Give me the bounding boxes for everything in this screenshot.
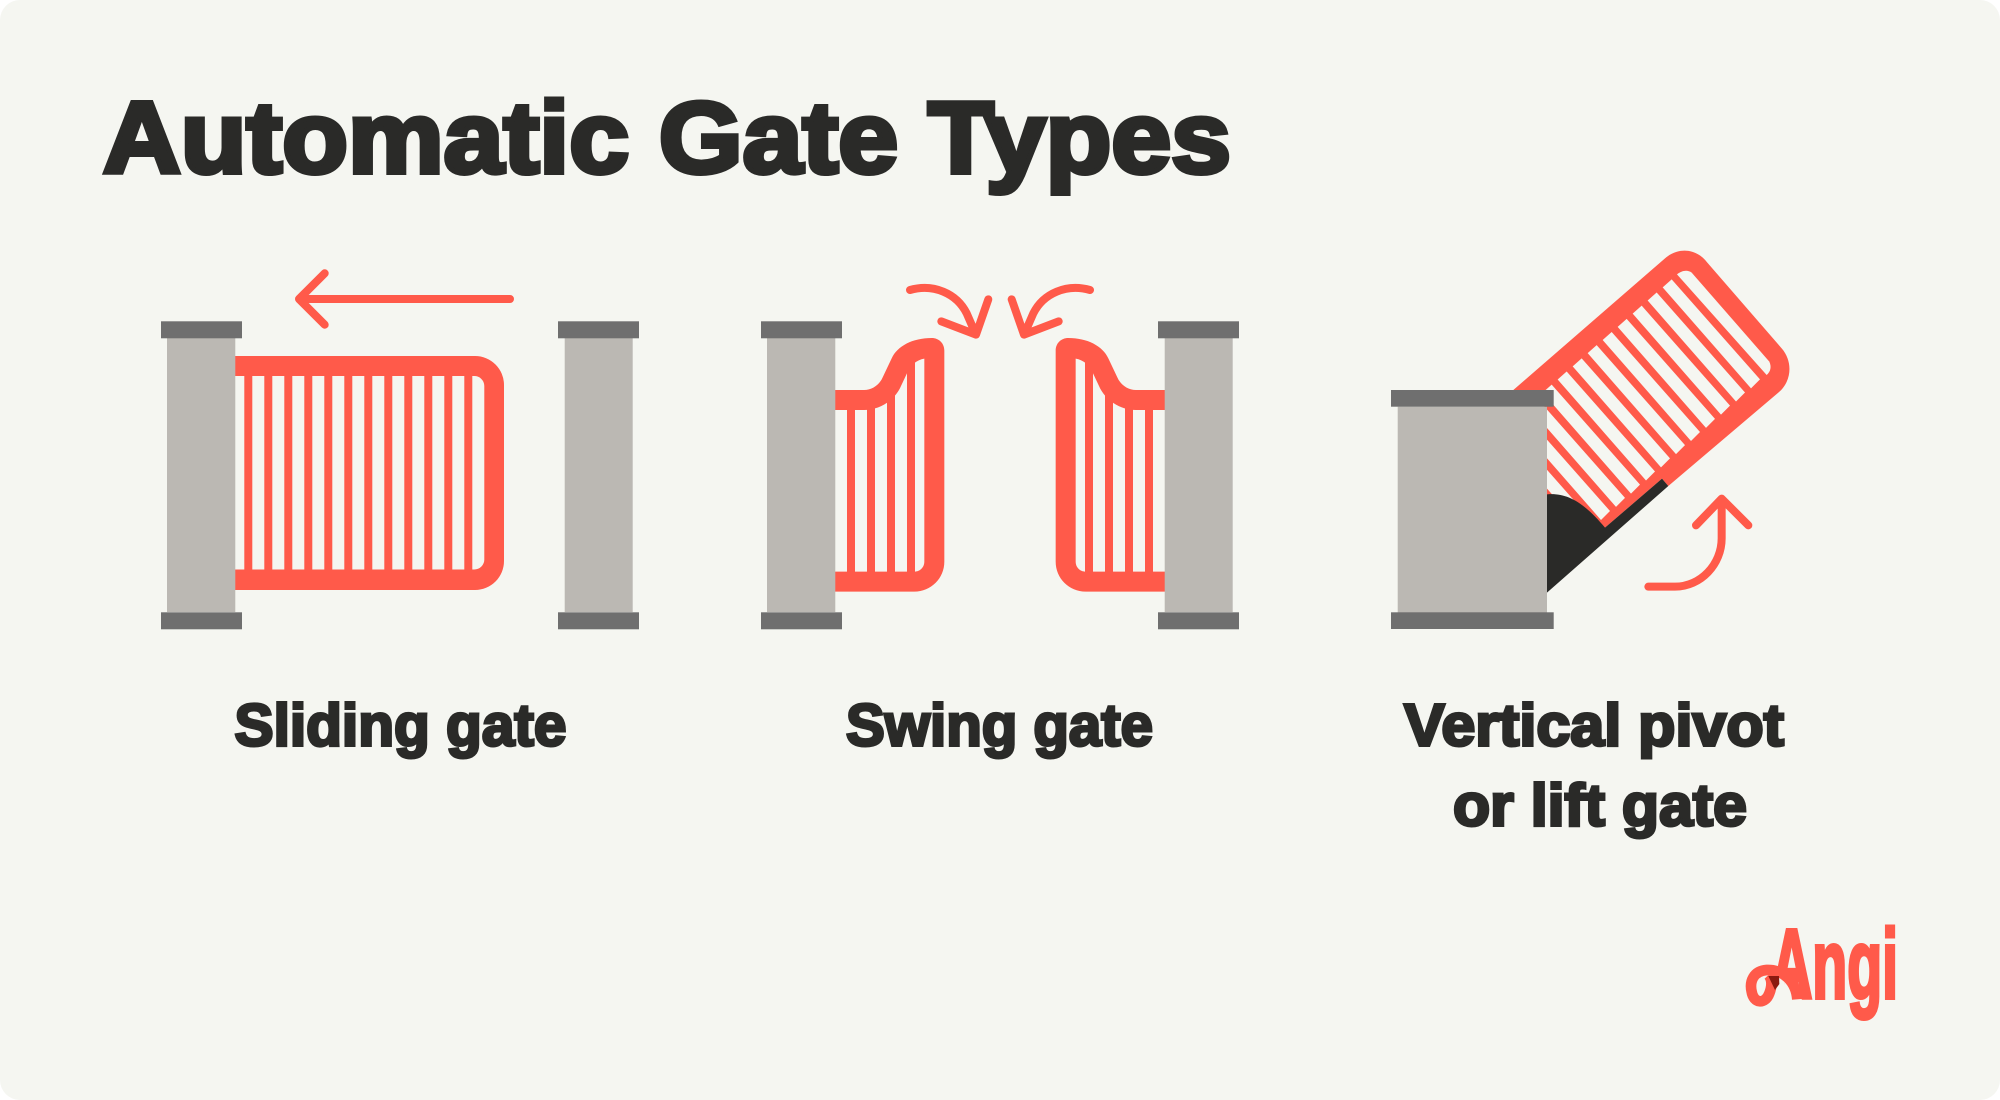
logo: Angi: Angi [1771,909,1898,1019]
post: sliding left [161,321,242,629]
gate: swing right leaf [1056,338,1170,592]
arrow: slide left [299,273,510,325]
arrow: swing closing left [910,288,988,335]
gate: sliding frame and bars [230,356,504,590]
arrow: swing closing right [1012,288,1090,335]
gate: lifted frame and bars [1498,251,1789,533]
post: sliding right [558,321,639,629]
illustration: swing gate [761,288,1239,629]
post: pivot [1391,390,1554,629]
illustration: sliding gate [161,273,639,629]
hinge: dark wedge [1547,479,1668,593]
post: swing left [761,321,842,629]
label: swing gate: Swing gate [846,692,1153,758]
label: vertical pivot or lift gate: or lift gate [1453,772,1747,838]
illustration: vertical pivot gate [1391,251,1789,629]
logo: Angi [1751,909,1898,1019]
label: sliding gate: Sliding gate [234,692,566,758]
post: swing right [1158,321,1239,629]
label: vertical pivot or lift gate [1404,692,1784,838]
gate: swing left leaf [830,338,944,592]
arrow: lift up [1648,499,1748,587]
title: Automatic Gate Types [103,82,1231,194]
label: vertical pivot or lift gate: Vertical pivot [1404,692,1784,758]
